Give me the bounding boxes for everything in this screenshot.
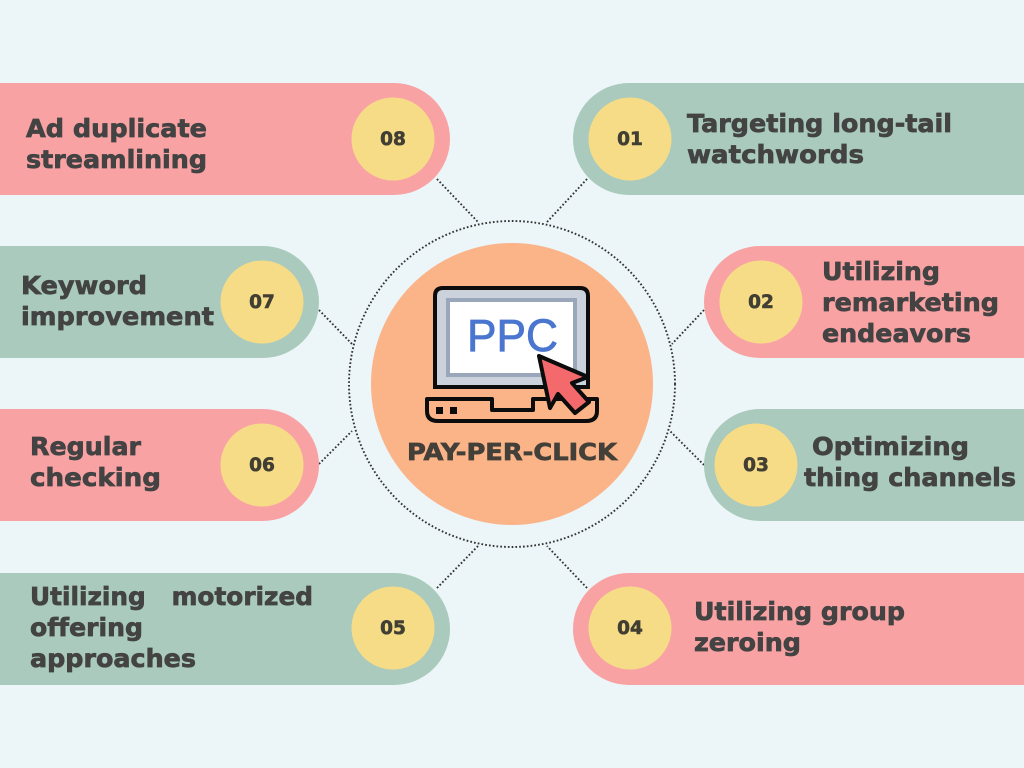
panel: 03 optimizing thing channels: 03 [743, 455, 769, 476]
panel: 05 motorized offering approaches [0, 573, 450, 685]
panel: 03 optimizing thing channels: thing channels [804, 463, 1016, 492]
panel: 07 keyword improvement: Keyword [21, 271, 147, 300]
panel: 04 utilizing group zeroing: 04 [617, 618, 643, 639]
panel: 04 utilizing group zeroing [573, 573, 1024, 685]
dotted ring [349, 221, 675, 547]
panel: 01 targeting long-tail watchwords [573, 83, 1024, 195]
panel: 02 utilizing remarketing endeavors: 02 [748, 292, 774, 313]
PPC label: PPC [467, 310, 558, 361]
panel: 06 regular checking [0, 409, 319, 521]
panel: 08 ad duplicate streamlining [0, 83, 450, 195]
panel: 05 motorized offering approaches: 05 [380, 618, 406, 639]
central heading: PAY-PER-CLICK [407, 440, 618, 466]
panel: 05 motorized offering approaches: approaches [30, 644, 196, 673]
panel: 08 ad duplicate streamlining: streamlining [26, 145, 207, 174]
panel: 04 utilizing group zeroing: Utilizing group [694, 597, 905, 626]
panel: 06 regular checking: checking [30, 463, 161, 492]
panel: 07 keyword improvement [0, 246, 319, 358]
panel: 02 utilizing remarketing endeavors: remarketing [822, 288, 999, 317]
icon: laptop with PPC screen and cursor [427, 288, 597, 421]
panel: 05 motorized offering approaches: Utilizing motorized [30, 582, 313, 611]
panel: 03 optimizing thing channels: Optimizing [812, 432, 969, 461]
panel: 08 ad duplicate streamlining: 08 [380, 129, 406, 150]
panel: 04 utilizing group zeroing: zeroing [694, 628, 801, 657]
panel: 06 regular checking: Regular [30, 432, 142, 461]
panel: 05 motorized offering approaches: offering [30, 613, 143, 642]
icon: cursor arrow [539, 356, 589, 413]
panel: 01 targeting long-tail watchwords: watchwords [687, 140, 864, 169]
panel: 02 utilizing remarketing endeavors: endeavors [822, 319, 971, 348]
panel: 06 regular checking: 06 [249, 455, 275, 476]
panel: 07 keyword improvement: 07 [249, 292, 275, 313]
central circle [371, 243, 653, 525]
panel: 07 keyword improvement: improvement [21, 302, 214, 331]
panel: 01 targeting long-tail watchwords: 01 [617, 129, 643, 150]
panel: 08 ad duplicate streamlining: Ad duplicate [26, 114, 207, 143]
panel: 01 targeting long-tail watchwords: Targeting long-tail [687, 109, 952, 138]
panel: 03 optimizing thing channels [704, 409, 1024, 521]
panel: 02 utilizing remarketing endeavors [704, 246, 1024, 358]
panel: 02 utilizing remarketing endeavors: Utilizing [822, 257, 940, 286]
